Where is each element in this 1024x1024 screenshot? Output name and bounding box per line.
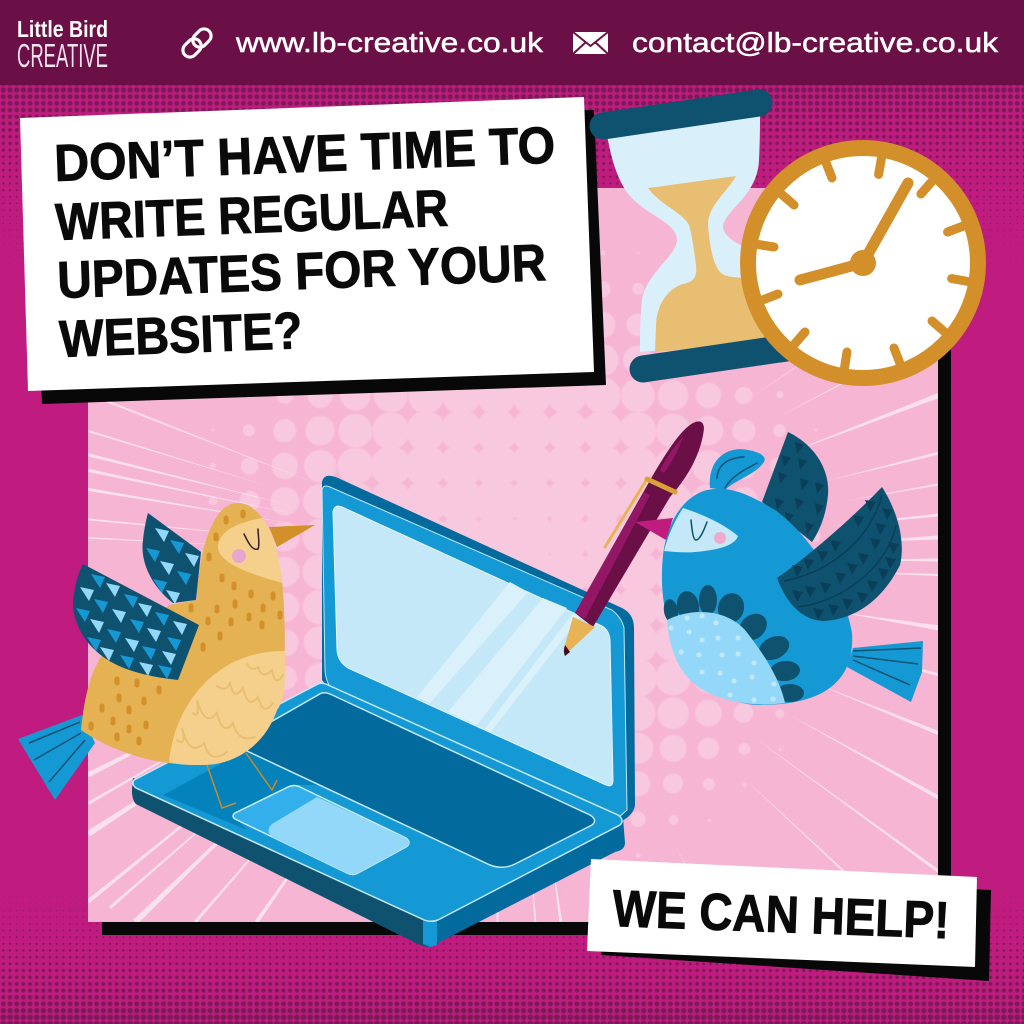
yellow bird beak — [269, 525, 315, 547]
laptop screen — [333, 506, 613, 786]
headline text: WRITE REGULAR — [54, 180, 449, 252]
blue bird crest — [710, 449, 765, 490]
blue bird body — [662, 489, 852, 705]
yellow bird cheek — [232, 549, 246, 563]
sunburst rays — [88, 366, 938, 922]
laptop lid back — [322, 476, 635, 822]
blue bird cheek — [714, 532, 726, 544]
blue bird — [635, 432, 923, 705]
screen glare — [417, 582, 580, 733]
blue bird back wing — [762, 432, 828, 542]
icon: envelope — [573, 32, 608, 54]
headline text: UPDATES FOR YOUR — [56, 234, 547, 310]
yellow bird eye — [244, 529, 259, 549]
icon: clock — [748, 148, 978, 378]
pen clip — [605, 479, 647, 547]
yellow bird — [18, 503, 315, 808]
website url: www.lb-creative.co.uk — [235, 27, 544, 58]
panel: pink comic background — [87, 187, 940, 924]
yellow bird face — [218, 518, 282, 583]
blue bird face — [664, 508, 738, 552]
yellow bird front wing — [73, 564, 199, 680]
blue bird front wing — [777, 487, 902, 621]
yellow bird back wing — [142, 513, 201, 604]
hourglass sand — [648, 176, 790, 352]
icon: hourglass — [603, 103, 800, 369]
top halftone dot band — [0, 85, 1024, 285]
yellow bird legs — [207, 753, 277, 808]
laptop base top — [133, 683, 622, 921]
pen barrel — [575, 421, 704, 627]
call to action text: WE CAN HELP! — [612, 880, 950, 950]
logo: Little Bird Creative: CREATIVE — [17, 37, 108, 74]
logo: Little Bird Creative — [17, 16, 108, 74]
hourglass glass — [607, 112, 790, 352]
laptop base side — [132, 778, 625, 947]
headline text — [53, 117, 556, 369]
headline card shadow — [30, 110, 606, 404]
headline text: DON’T HAVE TIME TO — [53, 117, 556, 193]
yellow bird body — [81, 503, 285, 765]
black shadow of pink panel — [102, 340, 951, 935]
pen nib — [564, 617, 595, 655]
laptop lid frame — [322, 486, 627, 818]
yellow bird belly — [169, 651, 285, 765]
laptop — [132, 476, 635, 947]
call to action card — [587, 859, 977, 967]
blue bird belly — [667, 612, 785, 704]
trackpad — [233, 786, 409, 874]
headline text: WEBSITE? — [58, 302, 303, 369]
shaded left of base — [163, 748, 320, 830]
clock hands — [800, 183, 908, 280]
halftone circles and diamonds — [209, 250, 820, 892]
blue bird scalloped feathers — [662, 585, 804, 702]
bottom halftone dot band — [0, 875, 1024, 1024]
icon: link — [180, 26, 214, 60]
blue bird tail — [847, 641, 923, 702]
email address: contact@lb-creative.co.uk — [632, 27, 999, 58]
keyboard — [232, 693, 595, 867]
hourglass caps — [603, 103, 800, 369]
clock ticks — [755, 155, 971, 371]
pen ring — [647, 479, 675, 492]
call to action card shadow — [601, 872, 991, 981]
headline card — [20, 97, 594, 391]
blue bird beak — [635, 518, 673, 540]
logo: Little Bird Creative: Little Bird — [17, 16, 108, 42]
pen — [564, 421, 704, 656]
yellow bird feathers — [177, 664, 283, 757]
yellow bird tail — [18, 715, 95, 800]
blue bird eye — [691, 520, 707, 540]
header bar — [0, 0, 1024, 85]
yellow bird speckles — [91, 512, 280, 743]
